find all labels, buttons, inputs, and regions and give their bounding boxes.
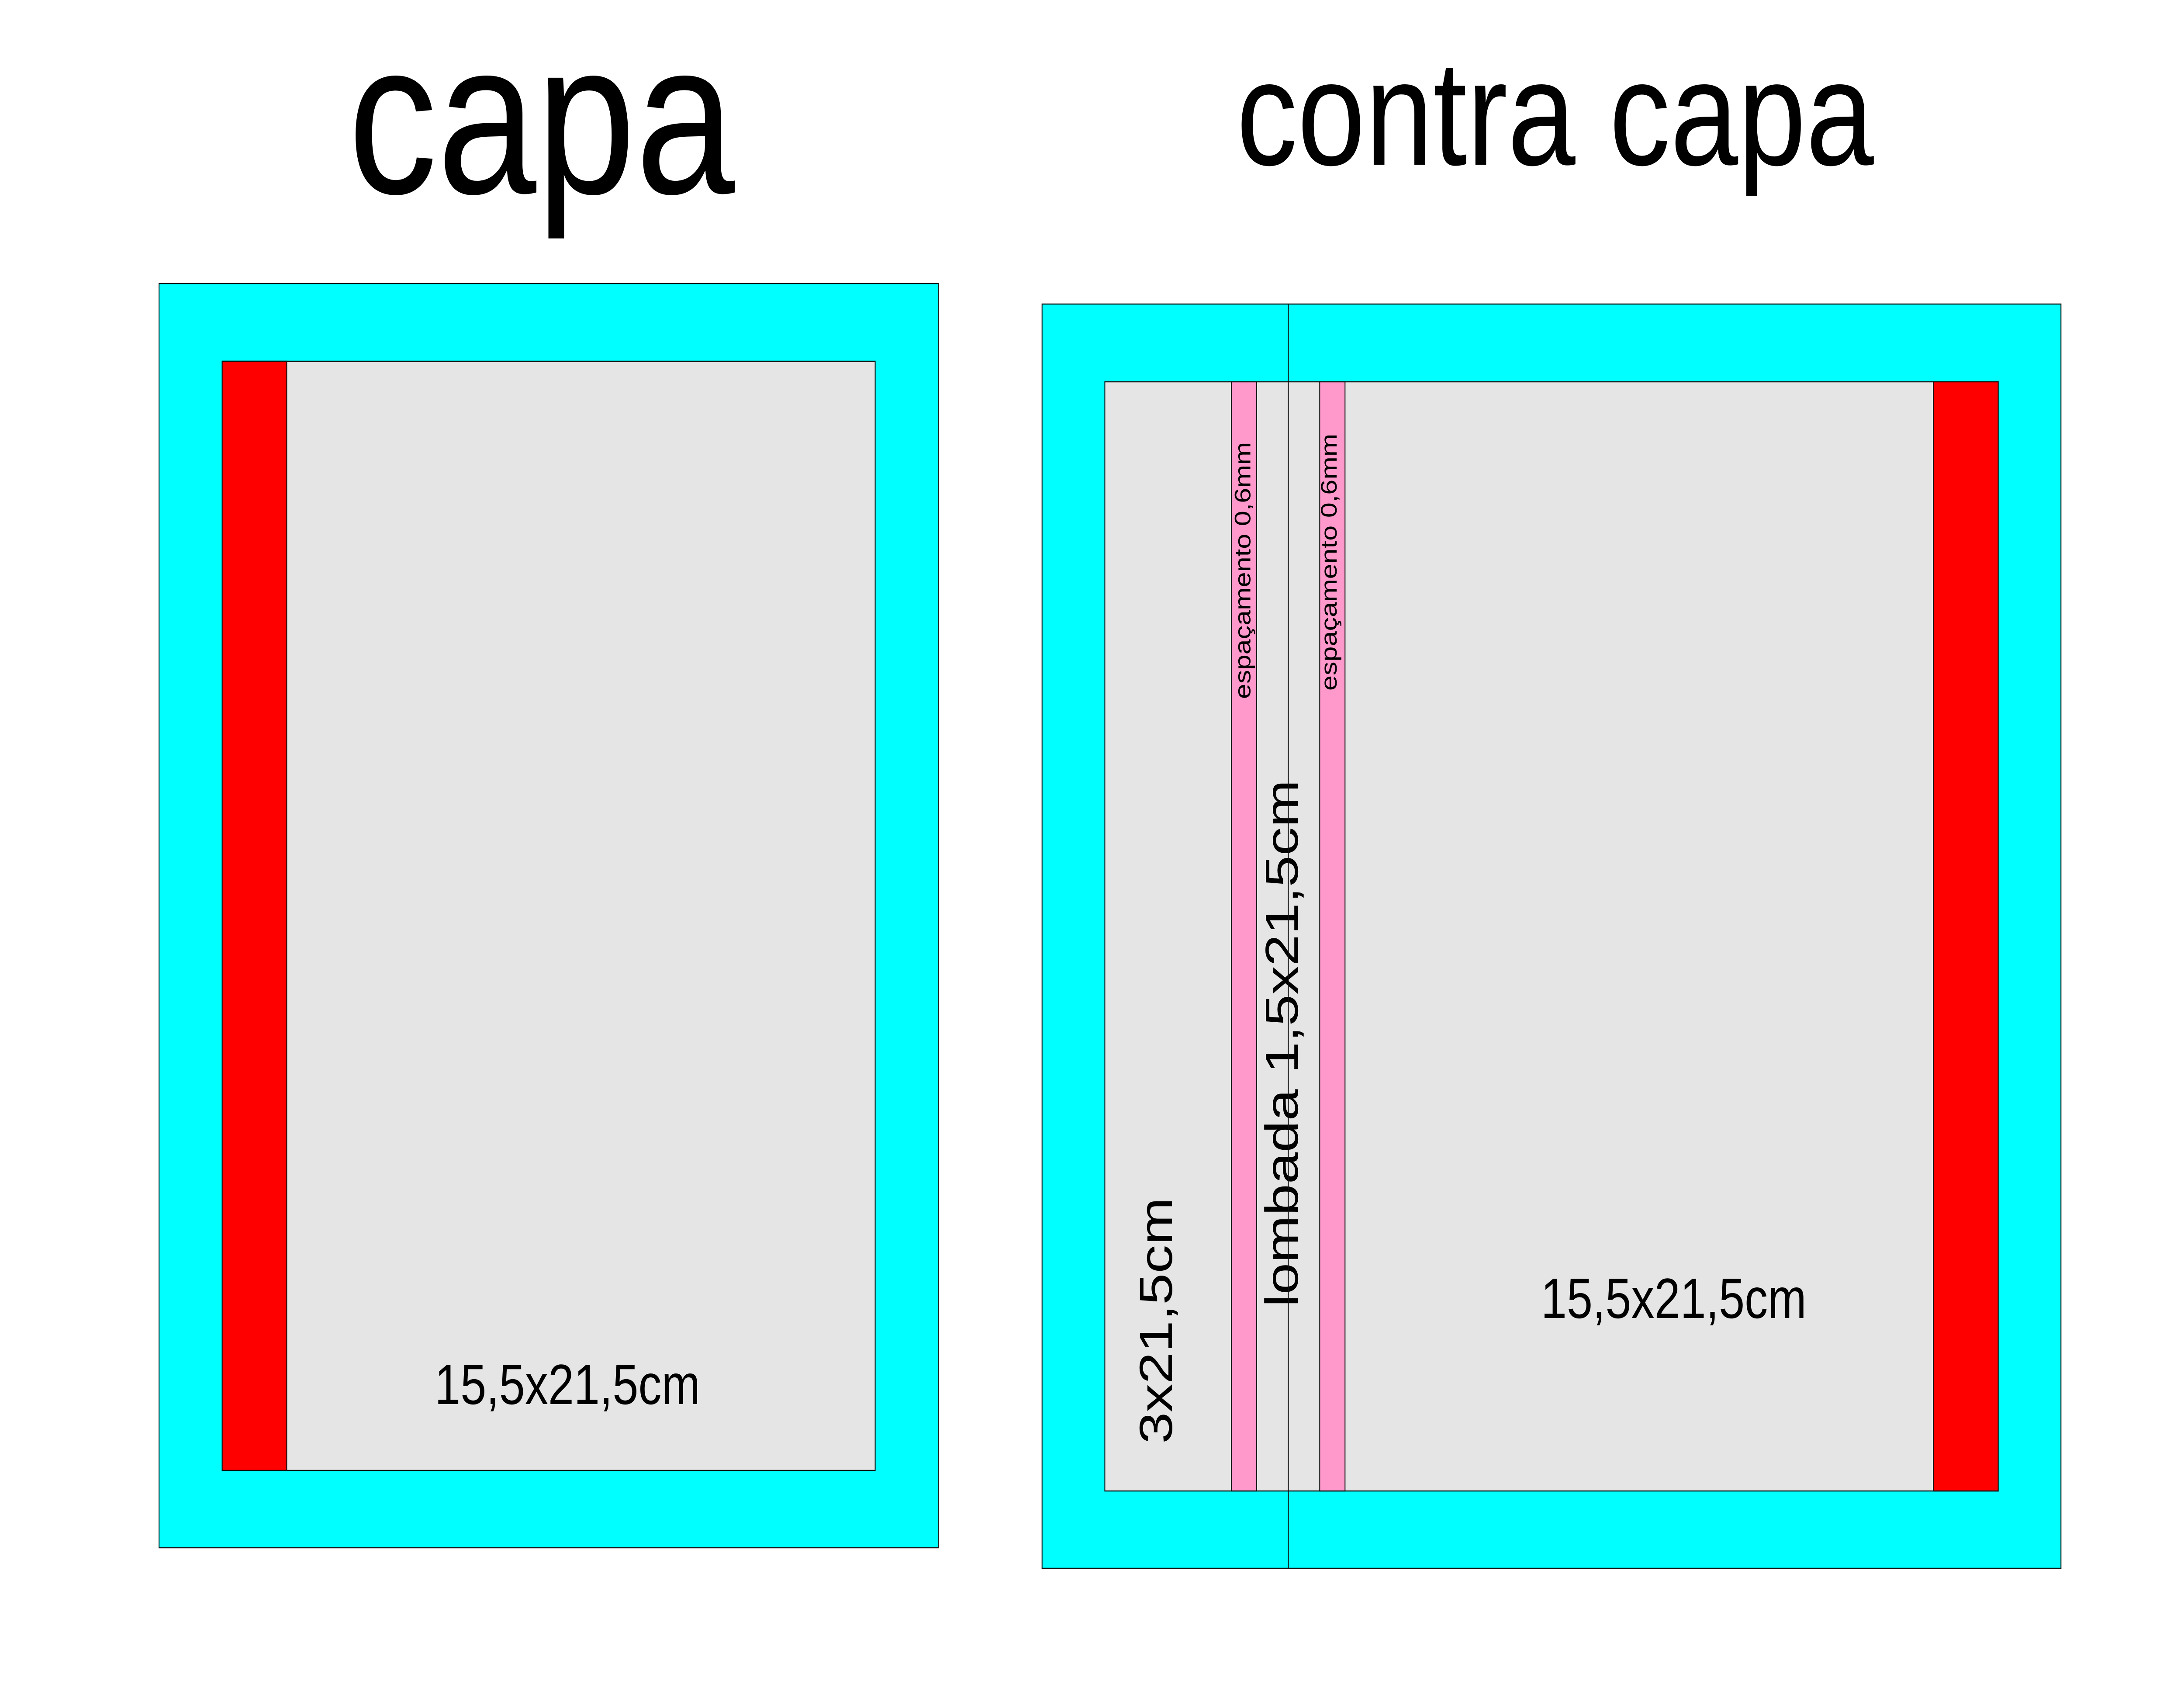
title: contra capa: contra capa — [1237, 30, 1875, 197]
contra capa bleed frame — [1042, 304, 2061, 1568]
spine centre line — [1288, 304, 1289, 1568]
contra capa page area — [1105, 382, 1998, 1491]
right spacing strip — [1320, 382, 1345, 1491]
capa page area — [222, 361, 875, 1470]
label: back cover size: 15,5x21,5cm — [1541, 1266, 1807, 1330]
panel: capa — [159, 284, 938, 1548]
capa size label: 15,5x21,5cm — [435, 1352, 700, 1416]
capa red spine strip — [222, 361, 287, 1470]
label: right spacing: espaçamento 0,6mm — [1317, 434, 1342, 691]
title: capa: capa — [348, 0, 736, 241]
label: spine size: lombada 1,5x21,5cm — [1256, 780, 1308, 1307]
panel: contra capa — [1042, 304, 2061, 1568]
label: flap size: 3x21,5cm — [1130, 1197, 1182, 1444]
contra capa red strip — [1933, 382, 1998, 1491]
label: left spacing: espaçamento 0,6mm — [1230, 442, 1255, 699]
capa bleed frame — [159, 284, 938, 1548]
left spacing strip — [1231, 382, 1257, 1491]
